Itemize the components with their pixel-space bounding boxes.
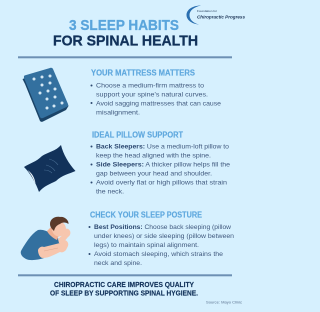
panel: pillow: IDEAL PILLOW SUPPORT <box>92 130 183 140</box>
panel: mattress <box>90 68 222 116</box>
panel: pillow: Back Sleepers: Use a medium-loft pillow to <box>96 144 230 150</box>
closing statement: OF SLEEP BY SUPPORTING SPINAL HYGIENE. <box>50 288 198 298</box>
icon: mattress <box>22 68 68 122</box>
panel: mattress: Choose a medium-firm mattress to <box>96 82 205 90</box>
panel: mattress: YOUR MATTRESS MATTERS <box>91 68 196 78</box>
icon part: shirt <box>21 230 60 260</box>
panel: mattress: Avoid sagging mattresses that can cause <box>96 100 222 107</box>
panel: mattress: support your spine's natural curves. <box>96 92 208 98</box>
panel: mattress: misalignment. <box>96 109 140 116</box>
panel: pillow <box>90 130 231 196</box>
logo: Chiropractic Progress <box>197 14 245 20</box>
logo <box>186 6 245 24</box>
closing statement: CHIROPRACTIC CARE IMPROVES QUALITY <box>54 280 194 289</box>
icon part: face <box>52 222 66 236</box>
icon: pillow <box>24 145 76 192</box>
source: Source: Mayo Clinic <box>206 300 242 304</box>
title <box>53 17 198 50</box>
closing statement <box>50 280 198 298</box>
panel: posture: Avoid stomach sleeping, which strains the <box>94 251 224 258</box>
panel: posture: under knees) or side sleeping (pillow between <box>94 233 235 240</box>
panel: posture: legs) to maintain spinal alignment. <box>94 242 199 249</box>
panel: pillow: keep the head aligned with the spine. <box>96 152 211 160</box>
panel: pillow: Avoid overly flat or high pillows that strain <box>96 180 228 186</box>
panel: posture: Best Positions: Choose back sleeping (pillow <box>94 224 231 231</box>
icon part: hair <box>50 217 69 231</box>
icon part: forearm <box>38 240 68 258</box>
panel: posture: neck and spine. <box>94 260 142 267</box>
panel: pillow: Side Sleepers: A thicker pillow helps fill the <box>96 162 231 168</box>
title: 3 SLEEP HABITS <box>69 17 179 34</box>
panel: posture: CHECK YOUR SLEEP POSTURE <box>90 210 203 220</box>
icon: sleeping person <box>21 217 70 260</box>
icon part: neck <box>47 226 60 240</box>
logo: Foundation for <box>197 9 217 13</box>
panel: posture <box>88 210 235 267</box>
title: FOR SPINAL HEALTH <box>53 32 198 50</box>
panel: pillow: the neck. <box>96 188 124 196</box>
icon part: upper arm and fist <box>58 229 70 243</box>
panel: pillow: gap between your head and shoulder. <box>96 170 212 178</box>
